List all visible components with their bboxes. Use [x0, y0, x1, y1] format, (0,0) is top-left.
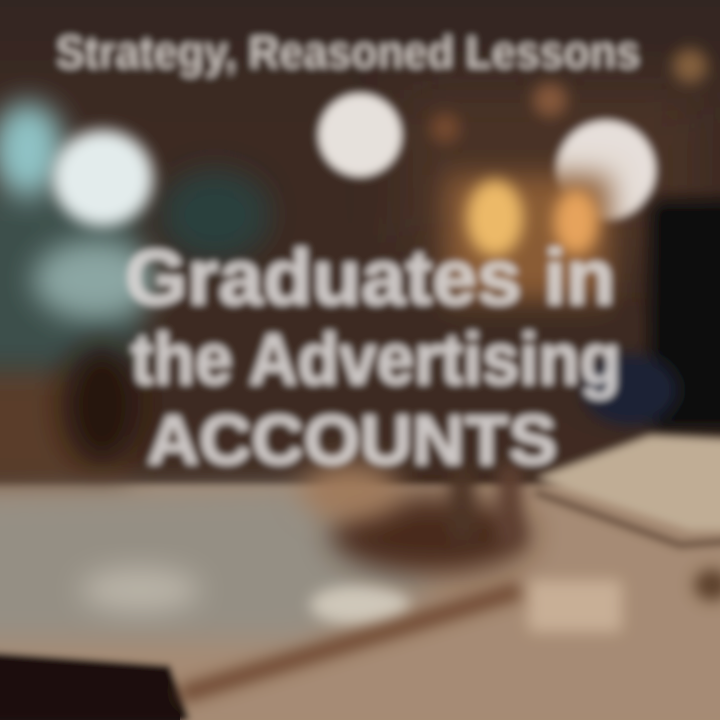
headline line 1: Graduates in — [125, 233, 615, 321]
panel: teal window on left — [0, 102, 270, 370]
panel: centre desk objects — [300, 462, 530, 573]
panel: dark book edge bottom left — [0, 590, 520, 720]
headline line 3: ACCOUNTS — [147, 401, 557, 479]
panel: bright note on table — [528, 580, 622, 632]
icon: centre white globe — [318, 93, 402, 177]
headline line 2: the Advertising — [131, 320, 621, 400]
icon: left white globe — [53, 130, 153, 226]
heading: top title: Strategy, Reasoned Lessons — [56, 26, 640, 78]
panel: open papers on left table — [0, 488, 440, 640]
panel: dark block on right — [582, 200, 720, 430]
title: main headline — [125, 233, 621, 479]
panel: dark object on left — [62, 343, 142, 467]
panel: glowing arched windows — [430, 49, 707, 300]
panel: book on right table — [535, 435, 720, 601]
icon: right white globe — [556, 120, 656, 220]
